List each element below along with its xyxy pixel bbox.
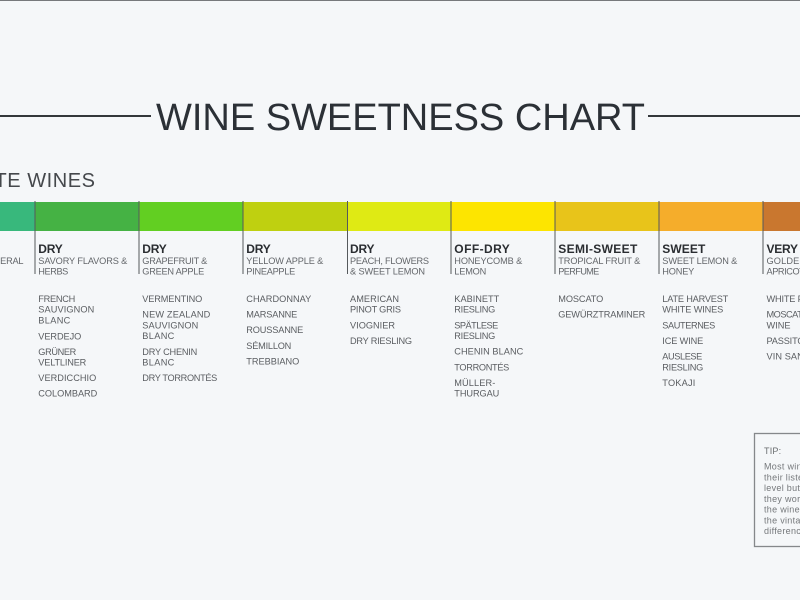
column: dry, yellow apple: MARSANNE <box>246 310 297 320</box>
column: off-dry: RIESLING <box>454 305 495 315</box>
column: dry, grapefruit: BLANC <box>142 358 175 368</box>
column: off-dry: RIESLING <box>454 331 495 341</box>
column: semi-sweet: GEWÜRZTRAMINER <box>558 310 646 320</box>
column: dry, grapefruit: DRY TORRONTÉS <box>142 373 217 383</box>
column: off-dry: MÜLLER- <box>454 378 495 388</box>
column: sweet: SWEET <box>662 242 706 256</box>
column: off-dry: TORRONTÉS <box>454 362 509 372</box>
column: dry, peach: DRY <box>350 242 374 256</box>
column: off-dry: CHENIN BLANC <box>454 347 524 357</box>
column: dry, grapefruit: DRY CHENIN <box>142 347 197 357</box>
column: off-dry: KABINETT <box>454 294 500 304</box>
column: dry, grapefruit: BLANC <box>142 331 175 341</box>
column: dry, savory flavors: VELTLINER <box>38 358 87 368</box>
column: sweet: LATE HARVEST <box>662 294 729 304</box>
column: off-dry <box>454 242 524 399</box>
column: dry, savory flavors: FRENCH <box>38 294 75 304</box>
column: off-dry: THURGAU <box>454 389 499 399</box>
column: dry, yellow apple: TREBBIANO <box>246 356 299 366</box>
column: semi-sweet <box>558 242 646 320</box>
column: dry, peach: AMERICAN <box>350 294 399 304</box>
column: dry, grapefruit: GREEN APPLE <box>142 267 204 277</box>
column: dry, yellow apple: DRY <box>246 242 271 256</box>
column: dry, savory flavors: SAVORY FLAVORS & <box>38 256 127 266</box>
column: dry, peach: DRY RIESLING <box>350 336 412 346</box>
column: sweet: RIESLING <box>662 362 703 372</box>
callout: tip <box>754 434 800 546</box>
column: dry, peach: PEACH, FLOWERS <box>350 256 429 266</box>
column: sweet: AUSLESE <box>662 352 702 362</box>
column: very sweet: WINE <box>766 320 790 330</box>
callout: tip: level but <box>764 483 800 493</box>
column: off-dry: OFF-DRY <box>454 242 510 256</box>
column: dry, grapefruit: GRAPEFRUIT & <box>142 256 207 266</box>
column: very sweet <box>766 242 800 362</box>
column: dry, savory flavors: COLOMBARD <box>38 389 98 399</box>
column: sweet: WHITE WINES <box>662 305 723 315</box>
column: sweet: TOKAJI <box>662 378 695 388</box>
column: dry, yellow apple: CHARDONNAY <box>246 294 311 304</box>
column: dry, savory flavors: VERDICCHIO <box>38 373 96 383</box>
column: dry, yellow apple: SÉMILLON <box>246 341 291 351</box>
column: sweet: SAUTERNES <box>662 320 715 330</box>
column: dry, yellow apple: ROUSSANNE <box>246 325 303 335</box>
column: semi-sweet: TROPICAL FRUIT & <box>558 256 640 266</box>
column: dry, yellow apple: YELLOW APPLE & <box>246 256 323 266</box>
column: off-dry: SPÄTLESE <box>454 320 498 330</box>
column: dry, peach: & SWEET LEMON <box>350 267 425 277</box>
column: dry, peach: VIOGNIER <box>350 320 395 330</box>
column: dry, grapefruit: SAUVIGNON <box>142 320 198 330</box>
column: dry, savory flavors: VERDEJO <box>38 331 81 341</box>
callout: tip: TIP: <box>764 446 781 456</box>
column: dry, peach: PINOT GRIS <box>350 305 401 315</box>
callout: tip: the wine <box>764 504 800 514</box>
column: dry, savory flavors: DRY <box>38 242 63 256</box>
column: sweet: SWEET LEMON & <box>662 256 737 266</box>
column: dry, yellow apple <box>246 242 323 366</box>
column: dry, savory flavors: HERBS <box>38 267 68 277</box>
column: dry, savory flavors <box>38 242 127 399</box>
column: semi-sweet: MOSCATO <box>558 294 603 304</box>
column: off-dry: LEMON <box>454 267 486 277</box>
column: semi-sweet: PERFUME <box>558 267 599 277</box>
column: dry, yellow apple: PINEAPPLE <box>246 267 295 277</box>
column: dry, peach <box>350 242 429 346</box>
sweetness colour bar <box>0 201 800 274</box>
column: dry, grapefruit: VERMENTINO <box>142 294 202 304</box>
column: off-dry: HONEYCOMB & <box>454 256 522 266</box>
column: dry, grapefruit <box>142 242 217 383</box>
column: dry, savory flavors: SAUVIGNON <box>38 305 94 315</box>
column: sweet: HONEY <box>662 267 694 277</box>
column: dry, grapefruit: NEW ZEALAND <box>142 310 211 320</box>
column: sweet <box>662 242 737 388</box>
title: WINE SWEETNESS CHART <box>156 97 645 139</box>
column: semi-sweet: SEMI-SWEET <box>558 242 638 256</box>
column: dry, savory flavors: GRÜNER <box>38 347 77 357</box>
column: dry, savory flavors: BLANC <box>38 315 71 325</box>
column: sweet: ICE WINE <box>662 336 703 346</box>
column: dry, grapefruit: DRY <box>142 242 167 256</box>
